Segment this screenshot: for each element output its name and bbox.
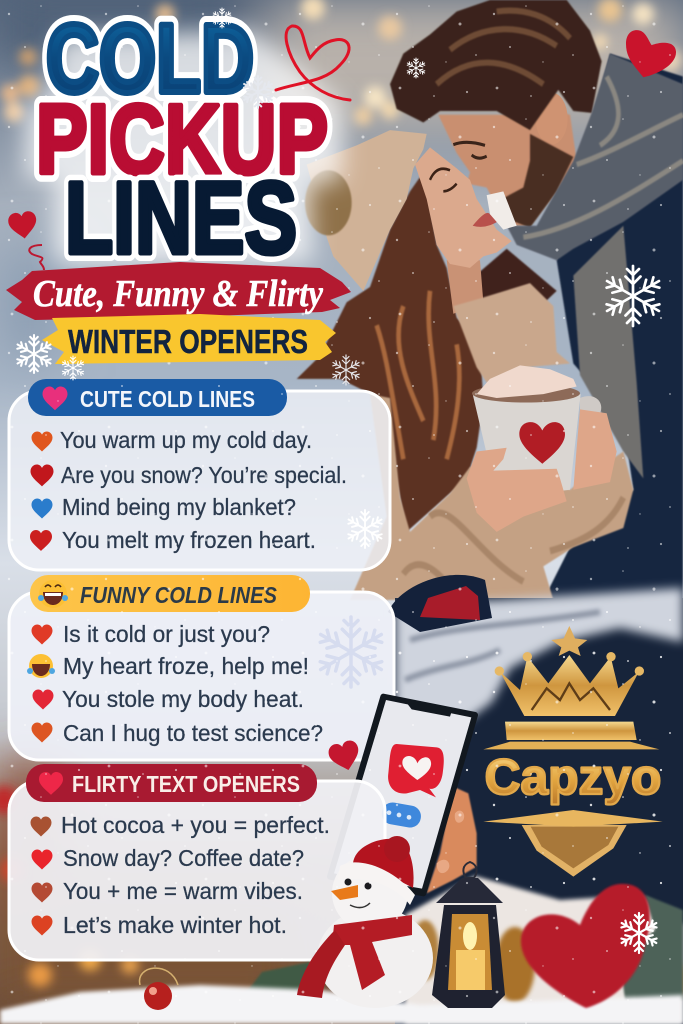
line: winter hot: Let’s make winter hot. xyxy=(63,912,287,938)
man: coat xyxy=(543,54,683,600)
man: hair highlights xyxy=(437,11,570,84)
eyes and nose xyxy=(344,878,352,886)
mug xyxy=(472,365,601,496)
emoji xyxy=(38,580,68,608)
mug heart xyxy=(519,422,565,464)
snow mound xyxy=(405,876,683,1024)
banner: winter openers xyxy=(42,314,336,364)
ground snow xyxy=(0,985,683,1024)
hat pompom xyxy=(384,836,410,862)
woman: neck xyxy=(447,260,483,314)
fingers xyxy=(437,811,464,873)
PICKUP: PICKUP xyxy=(36,84,328,194)
squiggle xyxy=(29,245,44,270)
lantern xyxy=(432,862,505,1008)
dark red pillow xyxy=(388,575,492,632)
COLD: COLD xyxy=(46,4,254,113)
small heart left xyxy=(7,210,39,240)
woman: sweater body xyxy=(350,394,633,600)
crown xyxy=(483,652,659,749)
man: hair xyxy=(390,0,602,130)
header pill: flirty xyxy=(26,764,317,802)
man: ear xyxy=(536,93,568,145)
banner: cute funny flirty xyxy=(6,262,351,320)
couple photo illustration xyxy=(297,0,683,600)
notch xyxy=(406,702,452,717)
shield xyxy=(483,810,663,877)
snowman xyxy=(297,836,433,1008)
crown brim xyxy=(483,742,659,749)
line: body heat: You stole my body heat. xyxy=(62,686,304,712)
logo wordmark: Capzyo xyxy=(485,749,661,805)
woman: face xyxy=(415,147,512,268)
line: snow day: Snow day? Coffee date? xyxy=(63,845,304,871)
banner: cute funny flirty: Cute, Funny & Flirty xyxy=(33,273,323,315)
woman: sweater collar xyxy=(453,283,570,383)
santa hat xyxy=(353,839,414,888)
small red heart on phone xyxy=(327,739,363,774)
snowman body xyxy=(317,908,433,1008)
snowflake on heart xyxy=(619,913,659,953)
banner: winter openers: WINTER OPENERS xyxy=(68,323,308,360)
snowy field behind logo xyxy=(395,588,683,1024)
line: cocoa: Hot cocoa + you = perfect. xyxy=(61,812,330,838)
phone with hand xyxy=(330,697,477,893)
snowman head xyxy=(332,855,408,931)
man: neck and face xyxy=(438,107,577,226)
PICKUP: PICKUP xyxy=(36,84,328,194)
Capzyo logo xyxy=(483,626,663,877)
ornament xyxy=(140,968,178,1010)
decorative snowflakes xyxy=(15,8,426,385)
line: warm vibes: You + me = warm vibes. xyxy=(63,878,303,904)
title halo xyxy=(25,30,342,262)
title xyxy=(7,4,350,275)
crown base xyxy=(505,722,637,740)
man: scarf folds xyxy=(523,77,683,237)
line: warm up: You warm up my cold day. xyxy=(60,427,312,453)
woman: pompom xyxy=(305,170,352,235)
heart top right xyxy=(626,30,676,77)
hands xyxy=(467,409,617,532)
blue typing bubble xyxy=(380,801,423,829)
marshmallows xyxy=(477,365,577,398)
header pill: funny xyxy=(30,575,310,612)
man: beard xyxy=(498,134,573,228)
shield top bar xyxy=(483,810,663,827)
woman: long hair xyxy=(297,172,483,532)
woman: knit hat xyxy=(307,130,427,291)
snowflake on coat xyxy=(603,266,663,326)
man: scarf xyxy=(507,54,683,260)
hand behind phone xyxy=(427,787,477,893)
woman: brow, eye and lips xyxy=(430,169,457,191)
LINES: LINES xyxy=(65,161,297,275)
warm fairy lights xyxy=(411,920,683,1006)
red scribble heart xyxy=(276,26,350,100)
pine branches right xyxy=(620,895,683,1000)
line: cold or you: Is it cold or just you? xyxy=(63,621,270,647)
foreground snow and winter scene xyxy=(0,836,683,1024)
man: hanging scarf xyxy=(573,226,643,478)
woman: sweater folds xyxy=(403,497,623,597)
COLD: COLD xyxy=(46,4,254,113)
man: mouth snow and smile xyxy=(487,191,517,230)
line: blanket: Mind being my blanket? xyxy=(62,494,296,520)
phone screen xyxy=(334,700,471,889)
woman: hair back xyxy=(480,249,557,310)
panel: cute cold lines xyxy=(9,379,390,570)
phone body xyxy=(330,697,475,893)
header pill: flirty: FLIRTY TEXT OPENERS xyxy=(72,771,300,797)
panel: funny cold lines xyxy=(9,575,394,760)
red chat bubble xyxy=(388,744,444,797)
candle xyxy=(456,950,485,990)
star xyxy=(551,626,587,656)
LINES: LINES xyxy=(65,161,297,275)
snowflake xyxy=(346,510,384,548)
panel: flirty text openers xyxy=(9,764,385,960)
pine branches left xyxy=(237,962,310,1012)
line: hug: Can I hug to test science? xyxy=(63,720,323,746)
line: frozen heart: You melt my frozen heart. xyxy=(62,527,316,553)
header pill: cute xyxy=(28,379,287,416)
red knit heart xyxy=(521,884,650,1008)
hat brim xyxy=(338,862,415,905)
header pill: cute: CUTE COLD LINES xyxy=(80,386,255,412)
large snowflake xyxy=(316,617,386,687)
woman: lips xyxy=(473,213,500,227)
red scarf xyxy=(332,915,412,990)
line: snow: Are you snow? You’re special. xyxy=(61,462,347,488)
line: heart froze: My heart froze, help me! xyxy=(63,653,309,679)
man: brow and eye xyxy=(453,142,487,158)
woman: hair highlights xyxy=(377,291,459,459)
header pill: funny: FUNNY COLD LINES xyxy=(80,582,278,608)
